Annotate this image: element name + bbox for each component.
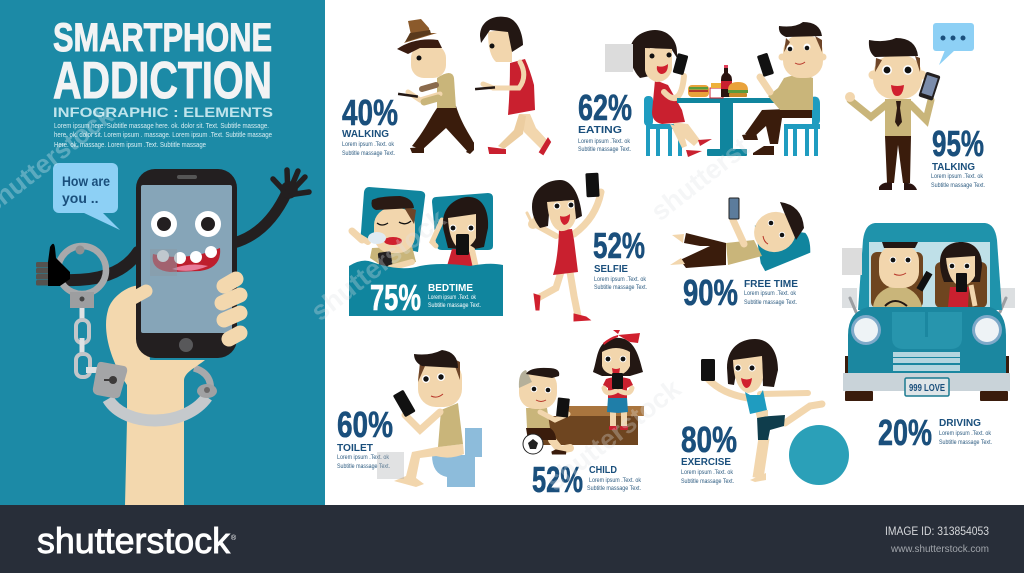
driver bbox=[871, 242, 932, 308]
stat: bedtime 75%: BEDTIME bbox=[428, 282, 473, 294]
subtitle: INFOGRAPHIC : ELEMENTS bbox=[53, 104, 273, 120]
stat: exercise 80%: EXERCISE bbox=[681, 456, 731, 468]
woman in bed bbox=[432, 197, 488, 268]
stat: toilet 60%: TOILET bbox=[337, 442, 374, 454]
boy bbox=[519, 368, 570, 454]
stat: bedtime 75%: 75% bbox=[370, 277, 421, 318]
stat: bedtime 75%: Lorem ipsum .Text. ok bbox=[428, 294, 477, 301]
website url: www.shutterstock.com bbox=[890, 543, 989, 555]
stat: talking 95%: 95% bbox=[932, 123, 984, 164]
stat: walking 40%: WALKING bbox=[342, 128, 389, 140]
exercise woman figure bbox=[701, 339, 849, 485]
icon: fingers bbox=[222, 279, 240, 339]
talking man figure bbox=[845, 23, 974, 190]
footer bar bbox=[0, 505, 1024, 573]
image id: IMAGE ID: 313854053 bbox=[885, 526, 989, 538]
eating man bbox=[742, 22, 826, 155]
stat: eating 62%: Lorem ipsum .Text. ok bbox=[578, 138, 631, 145]
panel: left title panel bbox=[0, 0, 325, 505]
stat: child 52%: 52% bbox=[532, 459, 583, 500]
icon: thumbs up hand bbox=[36, 244, 70, 286]
license plate: 999 LOVE bbox=[909, 383, 945, 394]
footer logo: ® bbox=[231, 534, 237, 542]
stat: bedtime 75% bbox=[370, 277, 481, 318]
stat: talking 95%: TALKING bbox=[932, 161, 975, 173]
stat: driving 20% bbox=[878, 412, 992, 453]
stat: driving 20%: DRIVING bbox=[939, 417, 981, 429]
stat: toilet 60% bbox=[337, 404, 404, 479]
license plate bbox=[905, 378, 949, 396]
stat: eating 62%: EATING bbox=[578, 124, 622, 136]
phone mouth bbox=[153, 246, 220, 272]
stat: driving 20%: Lorem ipsum .Text. ok bbox=[939, 430, 992, 437]
icon: phone arms bbox=[66, 192, 287, 280]
bumper bbox=[843, 373, 1010, 391]
stat: selfie 52% bbox=[593, 225, 647, 291]
icon: upper handcuff bbox=[58, 246, 106, 308]
stat: free time 90%: Lorem ipsum .Text. ok bbox=[744, 290, 797, 297]
stat: exercise 80% bbox=[681, 419, 737, 485]
grille bbox=[893, 352, 960, 371]
stat: walking 40% bbox=[342, 92, 398, 157]
icon: padlock bbox=[93, 362, 127, 398]
watermark text: shutterstock bbox=[305, 203, 452, 327]
intro text block bbox=[54, 121, 272, 149]
stat: selfie 52%: Lorem ipsum .Text. ok bbox=[594, 276, 647, 283]
stat: walking 40%: Lorem ipsum .Text. ok bbox=[342, 141, 395, 148]
watermark tiles bbox=[605, 44, 862, 275]
stat: selfie 52%: Subtitle massage Text. bbox=[594, 284, 647, 291]
stat: free time 90%: 90% bbox=[683, 272, 738, 313]
toilet man figure bbox=[393, 350, 482, 487]
stat: child 52% bbox=[532, 459, 642, 500]
stat: walking 40%: Subtitle massage Text. bbox=[342, 150, 395, 157]
stat: talking 95%: Lorem ipsum .Text. ok bbox=[931, 173, 984, 180]
eating scene bbox=[630, 22, 826, 157]
stat: eating 62%: Subtitle massage Text. bbox=[578, 146, 631, 153]
bedtime scene bbox=[349, 187, 503, 316]
icon: lower handcuff bbox=[108, 384, 217, 421]
stat: exercise 80%: Lorem ipsum .Text. ok bbox=[681, 469, 734, 476]
title: ADDICTION bbox=[53, 52, 272, 110]
exercise ball bbox=[789, 425, 849, 485]
child scene bbox=[519, 330, 644, 454]
icon: waving hand bbox=[273, 170, 309, 196]
girl bbox=[593, 330, 643, 430]
icon: chain bbox=[76, 308, 100, 377]
table bbox=[677, 98, 776, 156]
icon: phone character bbox=[136, 169, 237, 358]
stat: toilet 60%: 60% bbox=[337, 404, 393, 445]
icon: cuff back bbox=[194, 368, 210, 392]
speech bubble: dots bbox=[933, 23, 974, 65]
title bbox=[53, 16, 272, 110]
headlights bbox=[851, 315, 1002, 345]
soccer ball bbox=[523, 434, 543, 454]
stat: toilet 60%: Lorem ipsum .Text. ok bbox=[337, 454, 390, 461]
stat: child 52%: Subtitle massage Text. bbox=[587, 485, 641, 492]
eating woman bbox=[630, 30, 712, 157]
car roof and cabin bbox=[858, 223, 1002, 310]
stat: selfie 52%: 52% bbox=[593, 225, 645, 266]
car with driver and passenger bbox=[842, 223, 1015, 401]
bench bbox=[543, 406, 644, 445]
food bbox=[688, 65, 748, 98]
stat: driving 20%: Subtitle massage Text. bbox=[939, 439, 992, 446]
footer logo: shutterstock bbox=[37, 520, 231, 561]
stat: free time 90%: Subtitle massage Text. bbox=[744, 299, 797, 306]
pillows bbox=[361, 187, 493, 252]
stat: toilet 60%: Subtitle massage Text. bbox=[337, 463, 390, 470]
intro text block: here. ok. dolor sit. Lorem ipsum . massage. Lorem ipsum .Text. Subtitle massage bbox=[54, 130, 272, 139]
stat: talking 95% bbox=[931, 123, 985, 189]
blanket bbox=[349, 261, 503, 316]
stat: driving 20%: 20% bbox=[878, 412, 932, 453]
intro text block: Lorem ipsum here. Subtitle massage here. ok. dolor sit. Text. Subtitle massage. bbox=[54, 121, 269, 130]
stat: free time 90% bbox=[683, 272, 798, 313]
wheels bbox=[845, 391, 1008, 401]
watermark text: shutterstock bbox=[540, 373, 687, 497]
walking woman figure bbox=[475, 17, 550, 154]
intro text block: Here. ok. massage. Lorem ipsum .Text. Subtitle massage bbox=[54, 140, 206, 149]
stat: child 52%: Lorem ipsum .Text. ok bbox=[589, 477, 642, 484]
man's stool bbox=[784, 97, 820, 156]
car mirrors bbox=[842, 288, 1015, 312]
phone eyes bbox=[151, 211, 221, 237]
title: SMARTPHONE bbox=[53, 16, 272, 60]
passenger bbox=[935, 242, 987, 308]
watermark text: shutterst bbox=[645, 132, 755, 227]
speech bubble: how are you: How are bbox=[62, 173, 110, 189]
speech bubble: how are you bbox=[53, 163, 120, 230]
stat: eating 62% bbox=[578, 87, 632, 153]
stat: walking 40%: 40% bbox=[342, 92, 398, 133]
stat: exercise 80%: Subtitle massage Text. bbox=[681, 478, 734, 485]
sleeping man bbox=[352, 196, 416, 274]
icon: hand forearm bbox=[106, 286, 205, 505]
car body bbox=[848, 307, 1006, 373]
stat: selfie 52%: SELFIE bbox=[594, 263, 628, 275]
stat: talking 95%: Subtitle massage Text. bbox=[931, 182, 985, 189]
stat: free time 90%: FREE TIME bbox=[744, 278, 798, 290]
stat: child 52%: CHILD bbox=[589, 464, 617, 476]
icon: thumb bbox=[128, 291, 146, 301]
walking man figure bbox=[397, 19, 474, 154]
woman's stool bbox=[644, 96, 682, 156]
stat: exercise 80%: 80% bbox=[681, 419, 737, 460]
free time man figure bbox=[670, 198, 811, 271]
stat: eating 62%: 62% bbox=[578, 87, 632, 128]
selfie woman figure bbox=[527, 173, 601, 321]
toilet bbox=[432, 428, 482, 487]
watermark text bbox=[0, 100, 755, 497]
speech bubble: how are you: you .. bbox=[62, 190, 99, 206]
stat: bedtime 75%: Subtitle massage Text. bbox=[428, 302, 481, 309]
